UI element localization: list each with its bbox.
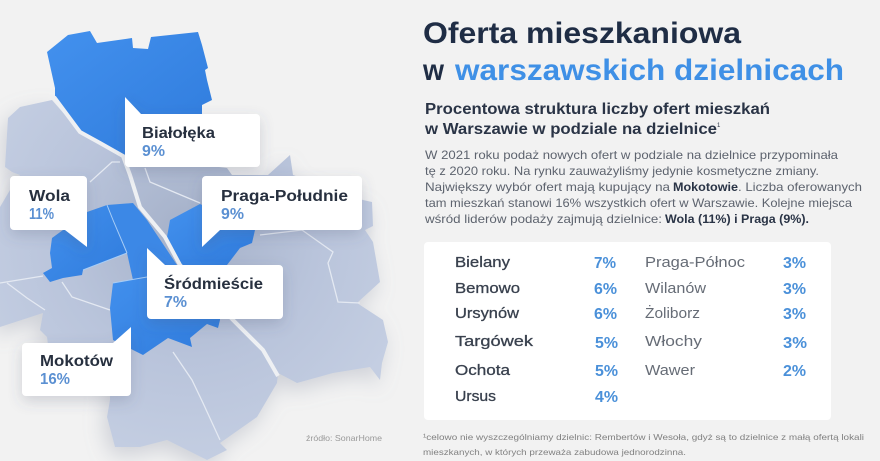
column: second districts: Wilanów [645,280,706,297]
map: light seams between blue districts [83,205,147,283]
footnote [423,432,864,457]
title: warszawskich dzielnicach [454,54,844,87]
subheading: Procentowa struktura liczby ofert mieszkań [425,101,770,118]
callout: Wola: Wola [29,188,70,205]
column: first districts: Targówek [455,333,534,350]
column: first districts: Bielany [455,254,511,271]
map of Warsaw districts [0,31,388,460]
subheading: 1 [717,123,721,129]
map: Wola district [43,205,127,282]
column: second districts: Praga-Północ [645,254,746,271]
body text: Mokotowie [673,180,738,194]
map: district borders [0,162,360,440]
panel: district table [424,242,831,420]
callout: Białołęka: 9% [142,143,165,160]
body text: . Liczba oferowanych [738,180,862,194]
callout: Mokotów [22,327,131,396]
column: first districts: Ochota [455,362,511,379]
column: first districts [455,254,618,406]
callout: Mokotów: Mokotów [40,353,114,370]
map: river Vistula [54,97,278,376]
title: Oferta mieszkaniowa [423,17,741,50]
map: Praga-Południe district [167,204,255,265]
body text: wśród liderów podaży zajmują dzielnice: [424,212,662,226]
callout: Śródmieście: 7% [164,294,187,311]
column: second districts: Włochy [645,333,703,350]
body text: tam mieszkań stanowi 16% wszystkich ofert w Warszawie. Kolejne miejsca [425,196,852,210]
map: Śródmieście district [107,203,177,280]
body text: Największy wybór ofert mają kupujący na [425,180,670,194]
column: second districts: Wawer [645,362,695,379]
map: Białołęka district [47,31,212,155]
callout: Śródmieście [147,248,283,319]
map: grey districts [0,100,388,460]
column: first districts: 5% [595,335,618,352]
title: w [422,54,445,87]
column: first districts: Ursynów [455,305,519,322]
body text: Wola (11%) i Praga (9%). [665,212,809,226]
subheading [424,101,770,138]
column: first districts: Ursus [455,388,496,405]
callout: Białołęka: Białołęka [142,125,215,142]
title [422,17,844,87]
column: first districts: Bemowo [455,280,520,297]
callout: Wola [10,176,87,247]
column: first districts: 5% [595,363,618,380]
callout: Praga-Południe: 9% [221,206,244,223]
column: first districts: 4% [595,389,618,406]
body text [424,148,862,226]
callout: Śródmieście: Śródmieście [164,274,263,293]
callout: Białołęka [125,97,260,167]
body text: W 2021 roku podaż nowych ofert w podziale na dzielnice przypominała [425,148,838,162]
column: second districts: 3% [783,281,806,298]
column: second districts: 3% [783,306,806,323]
footnote: ¹celowo nie wyszczególniamy dzielnic: Rembertów i Wesoła, gdyż są to dzielnice z małą ofertą lokali [423,432,864,442]
column: second districts: Żoliborz [645,304,700,322]
column: first districts: 7% [594,255,616,272]
column: second districts: 2% [783,363,806,380]
column: first districts: 6% [594,281,617,298]
map: Mokotów district [110,265,220,355]
column: second districts: 3% [783,335,807,352]
callout: Wola: 11% [29,206,54,223]
column: second districts: 3% [783,255,806,272]
column: second districts [645,254,807,380]
callout: Mokotów: 16% [40,371,70,388]
column: first districts: 6% [594,306,617,323]
source note: źródło: SonarHome [306,433,382,443]
callout: Praga-Południe: Praga-Południe [221,188,348,205]
footnote: mieszkanych, w których przeważa zabudowa jednorodzinna. [423,447,686,457]
subheading: w Warszawie w podziale na dzielnice [424,121,717,138]
callout: Praga-Południe [202,176,362,247]
body text: tę z 2020 roku. Na rynku zauważyliśmy jedynie kosmetyczne zmiany. [425,164,819,178]
